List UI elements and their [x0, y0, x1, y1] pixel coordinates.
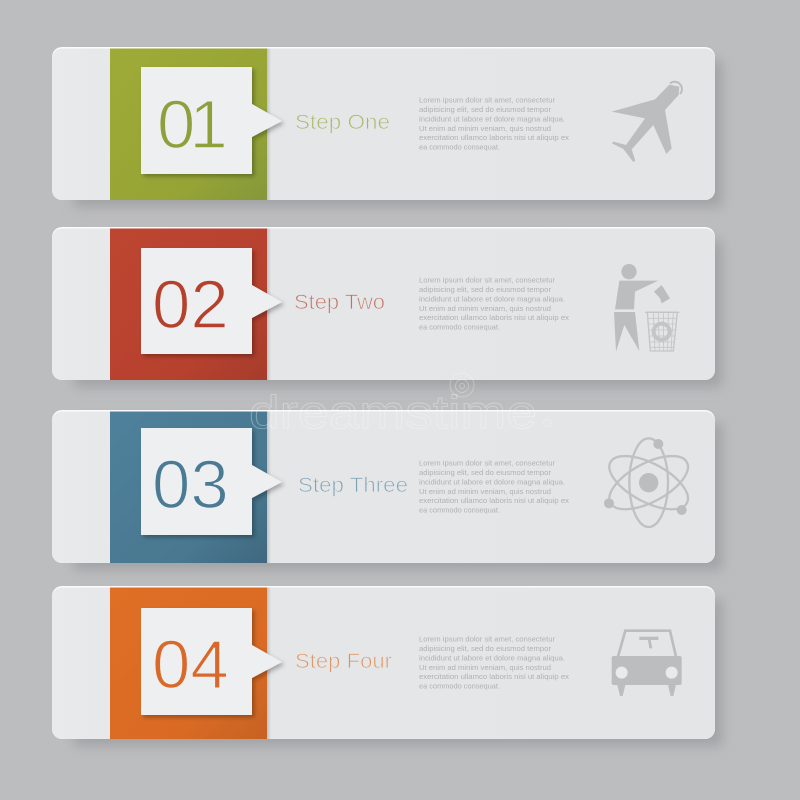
text block: step two: incididunt ut labore et dolore magna aliqua.	[419, 294, 565, 304]
text block: step three: Ut enim ad minim veniam, quis nostrud	[419, 487, 551, 496]
icon: car	[612, 631, 682, 696]
heading: step one: Step One	[295, 111, 390, 134]
panel: step two	[52, 227, 722, 387]
watermark: dreamstime	[249, 386, 537, 438]
text block: step three: adipisicing elit, sed do eiusmod tempor	[419, 468, 552, 477]
number card: 01: 01	[157, 86, 224, 163]
text block: step two: Ut enim ad minim veniam, quis nostrud	[419, 304, 551, 313]
number card: 02	[141, 248, 282, 354]
text block: step three: ea commodo consequat.	[419, 506, 500, 515]
icon: atom	[601, 438, 696, 527]
icon: person recycling trash	[614, 264, 679, 352]
text block: step four	[419, 634, 569, 691]
heading: step three: Step Three	[298, 474, 408, 497]
text block: step four: adipisicing elit, sed do eiusmod tempor	[419, 644, 552, 653]
number card: 02: 02	[152, 266, 229, 343]
text block: step four: ea commodo consequat.	[419, 682, 500, 691]
text block: step four: Lorem ipsum dolor sit amet, consectetur	[419, 634, 556, 644]
number card: 01	[141, 67, 282, 174]
panel: step three	[52, 410, 722, 570]
color band: red	[110, 228, 267, 380]
text block: step one: adipisicing elit, sed do eiusmod tempor	[419, 105, 552, 114]
text block: step two	[419, 276, 569, 332]
panel: step one	[52, 47, 722, 207]
text block: step one: Ut enim ad minim veniam, quis nostrud	[419, 124, 551, 133]
text block: step one: ea commodo consequat.	[419, 143, 500, 152]
text block: step four: Ut enim ad minim veniam, quis nostrud	[419, 663, 551, 672]
text block: step three: incididunt ut labore et dolore magna aliqua.	[419, 478, 565, 486]
number card: 04	[141, 608, 282, 715]
number card: 03: 03	[152, 446, 229, 523]
text block: step two: ea commodo consequat.	[419, 323, 500, 332]
text block: step three: exercitation ullamco laboris nisi ut aliquip ex	[419, 496, 569, 505]
heading: step four: Step Four	[295, 650, 392, 673]
text block: step two: exercitation ullamco laboris nisi ut aliquip ex	[419, 313, 569, 322]
text block: step two: adipisicing elit, sed do eiusmod tempor	[419, 285, 552, 294]
number card: 03	[141, 428, 282, 535]
color band: orange	[110, 588, 267, 739]
text block: step four: incididunt ut labore et dolore magna aliqua.	[419, 654, 565, 662]
panel: step four	[52, 586, 722, 746]
color band: olive	[110, 48, 267, 200]
text block: step one: Lorem ipsum dolor sit amet, consectetur	[419, 96, 556, 104]
text block: step three	[419, 458, 569, 515]
text block: step three: Lorem ipsum dolor sit amet, consectetur	[419, 458, 556, 468]
text block: step one	[419, 96, 569, 152]
color band: blue	[110, 412, 267, 563]
number card: 04: 04	[152, 626, 229, 703]
heading: step two: Step Two	[294, 291, 385, 314]
watermark	[249, 373, 550, 438]
icon: airplane	[612, 82, 682, 162]
text block: step four: exercitation ullamco laboris nisi ut aliquip ex	[419, 672, 569, 681]
text block: step one: incididunt ut labore et dolore magna aliqua.	[419, 114, 565, 124]
text block: step two: Lorem ipsum dolor sit amet, consectetur	[419, 276, 556, 284]
text block: step one: exercitation ullamco laboris nisi ut aliquip ex	[419, 133, 569, 142]
